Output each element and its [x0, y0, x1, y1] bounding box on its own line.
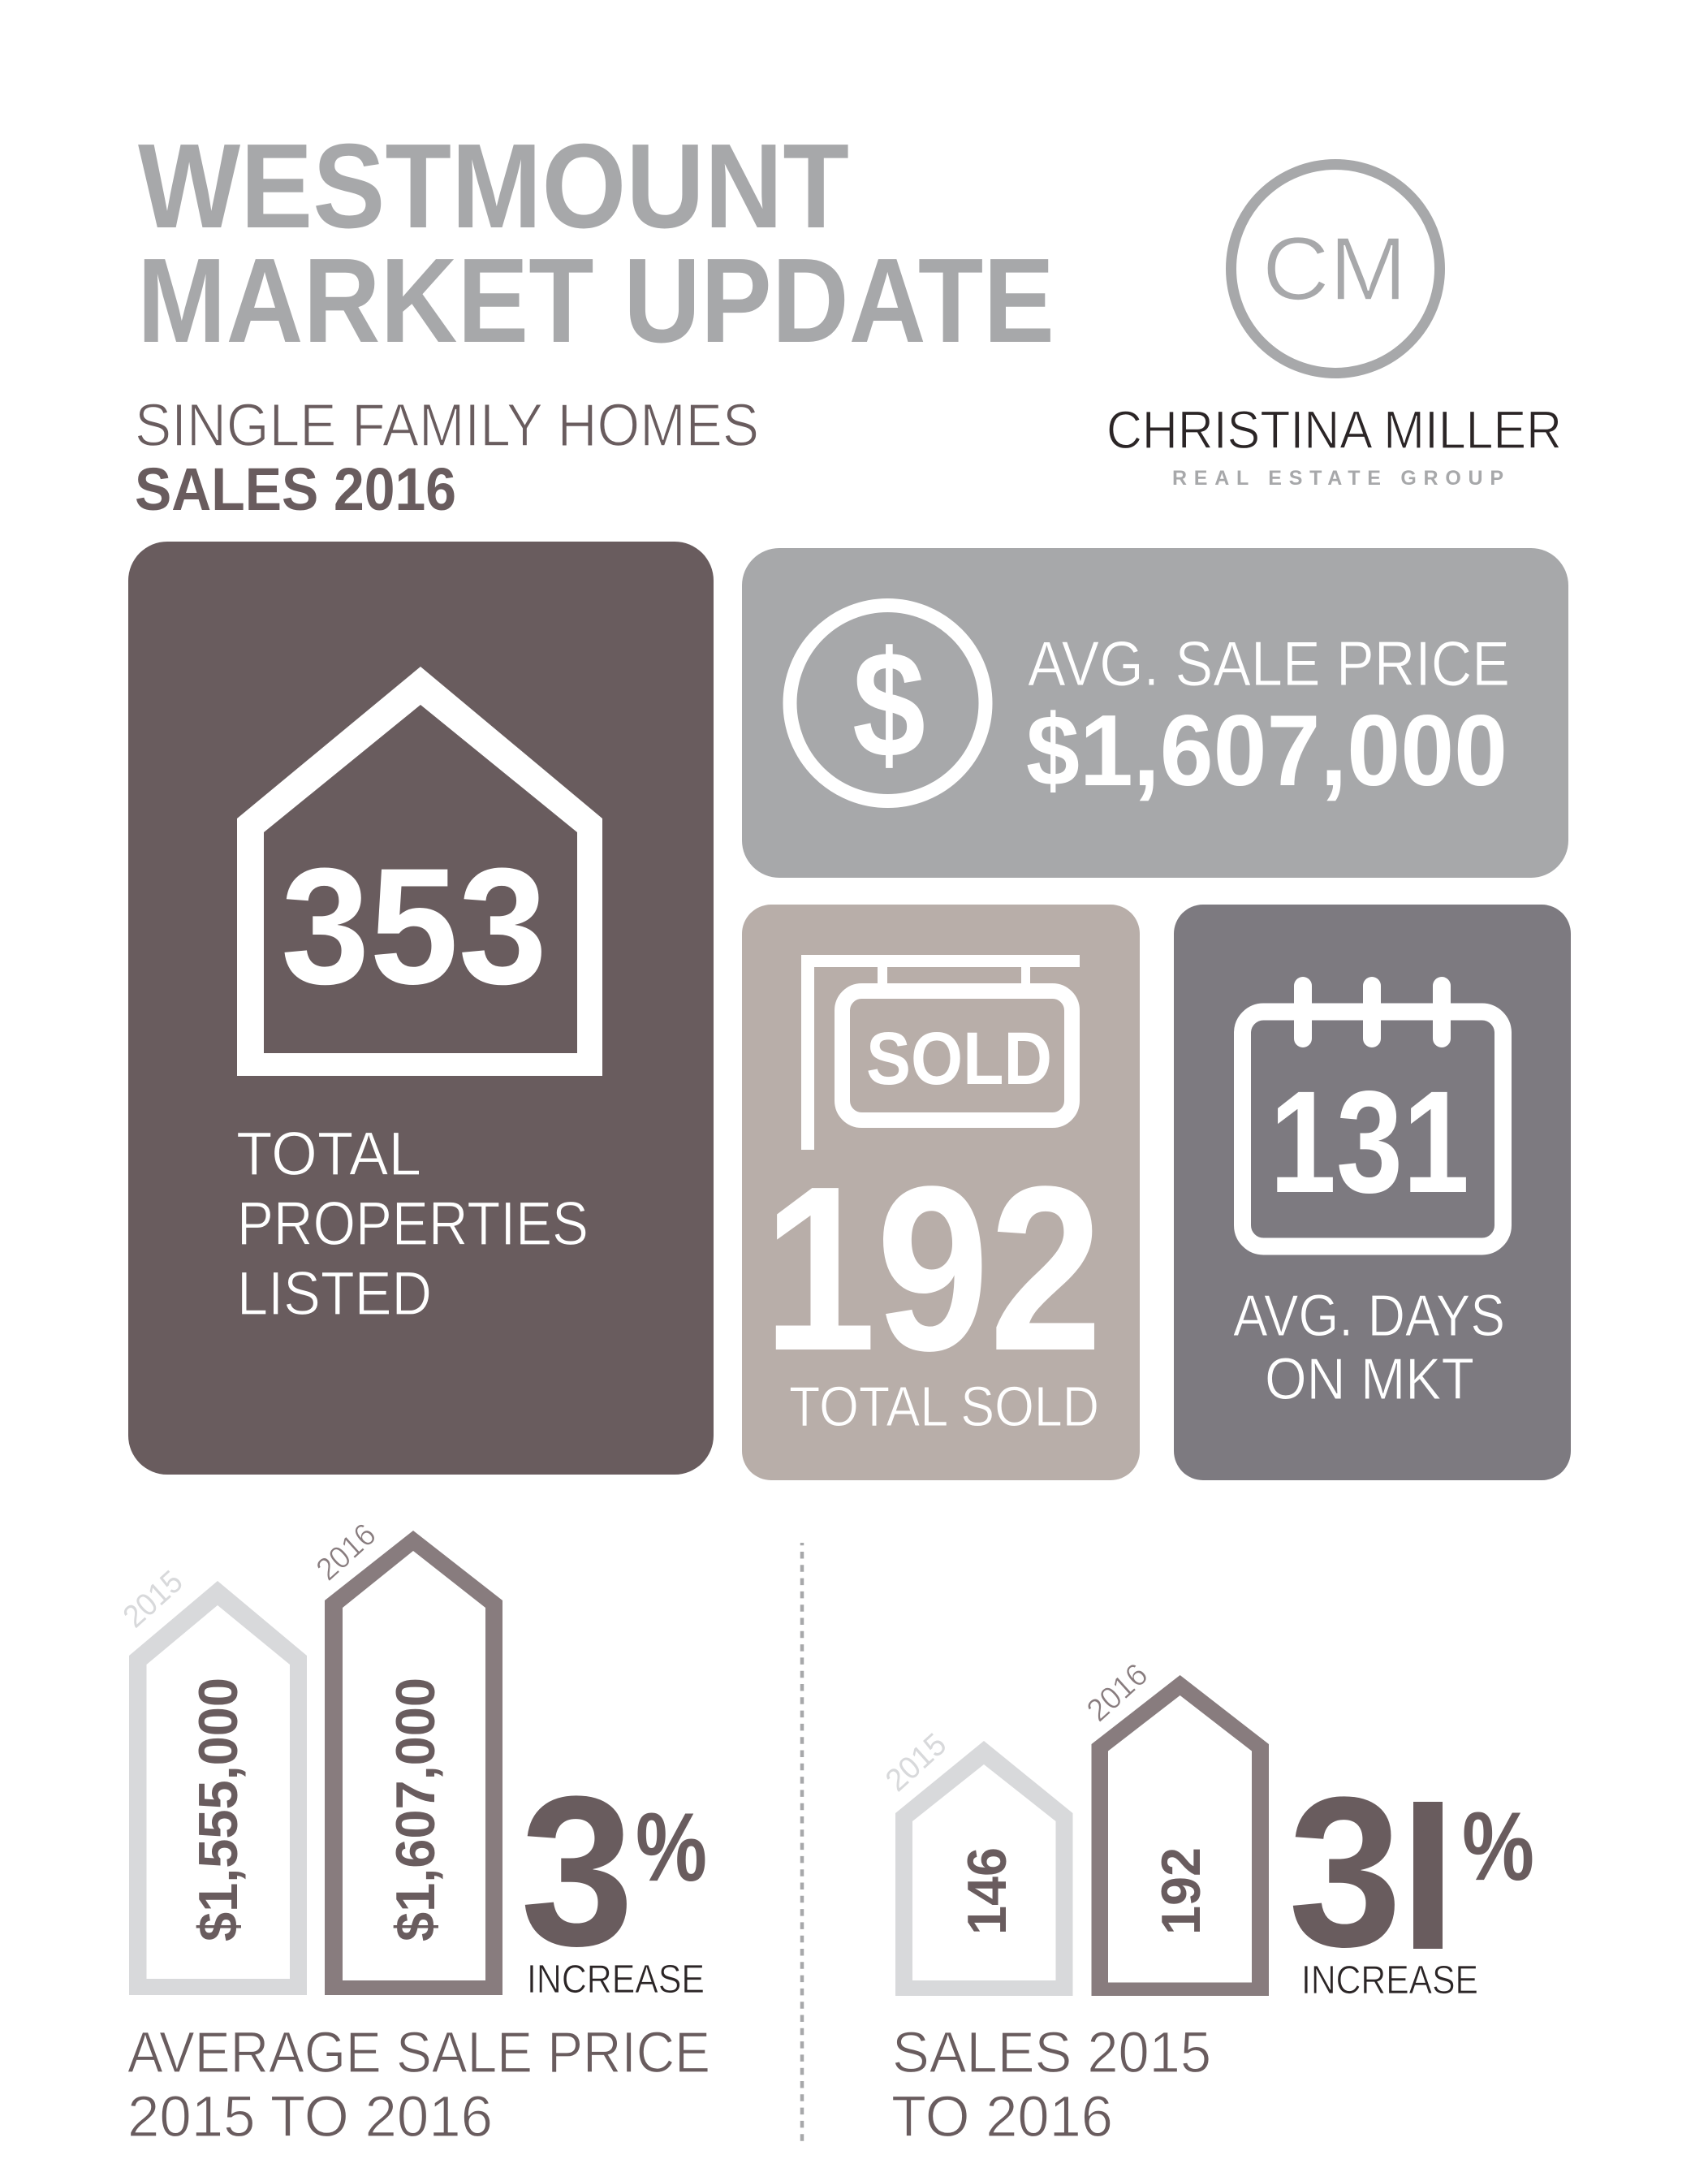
stat: 31 percent increase: %	[1462, 1792, 1534, 1901]
title: MARKET UPDATE	[137, 234, 1055, 368]
icon: house outline	[237, 667, 602, 1076]
panel: total sold	[742, 905, 1140, 1480]
icon: dollar circle: $	[852, 620, 925, 789]
bar: 2015 sales house	[895, 1741, 1073, 1996]
panel: total properties listed	[128, 542, 714, 1475]
label: total properties listed: TOTAL	[236, 1120, 421, 1189]
stat: 353: 353	[281, 834, 547, 1019]
stat: 31 percent increase: 3	[1288, 1752, 1402, 1991]
label: 2015: 2015	[117, 1564, 189, 1635]
chart: sales comparison	[879, 1657, 1534, 2149]
title: WESTMOUNT	[138, 119, 849, 253]
title	[137, 119, 1055, 368]
icon: sold sign	[801, 955, 1080, 1150]
stat: 31 percent increase	[1292, 1796, 1533, 1949]
logo: Christina Miller Real Estate Group	[1106, 164, 1562, 490]
bar: 2016 sales house	[1091, 1675, 1269, 1996]
label: total properties listed: PROPERTIES	[237, 1190, 589, 1259]
chart: average sale price comparison	[117, 1517, 710, 2149]
subtitle: SALES 2016	[135, 456, 456, 523]
bar: 2015 price house	[129, 1581, 307, 1995]
caption: sales 2015 to 2016: SALES 2015	[892, 2021, 1211, 2085]
bar: 2016 sales house: 192	[1150, 1847, 1212, 1935]
label: total sold: TOTAL SOLD	[789, 1375, 1099, 1438]
icon: sold sign: SOLD	[866, 1017, 1052, 1100]
bar: 2015 sales house: 146	[956, 1847, 1018, 1935]
caption: sales 2015 to 2016: TO 2016	[891, 2085, 1113, 2149]
icon: calendar	[1242, 986, 1503, 1246]
icon: dollar circle	[790, 606, 986, 801]
logo: Christina Miller Real Estate Group: REAL ESTATE GROUP	[1172, 467, 1503, 490]
bar: 2015 price house: $1,555,000	[188, 1678, 249, 1941]
stat: 31 percent increase: 1	[1380, 1756, 1499, 1994]
stat: 3 percent increase	[520, 1751, 707, 1990]
caption: average sale price 2015 to 2016: 2015 TO 2016	[127, 2085, 493, 2149]
label: avg. days on mkt	[1233, 1284, 1505, 1412]
panel: average days on market	[1174, 905, 1571, 1480]
stat: 131: 131	[1270, 1060, 1469, 1223]
label: avg. days on mkt: ON MKT	[1265, 1347, 1474, 1412]
caption: average sale price 2015 to 2016: AVERAGE SALE PRICE	[127, 2021, 710, 2085]
bar: 2016 price house: $1,607,000	[385, 1678, 446, 1941]
label: avg. sale price: AVG. SALE PRICE	[1028, 628, 1510, 699]
label: avg. days on mkt: AVG. DAYS	[1233, 1284, 1505, 1349]
label: increase: INCREASE	[1301, 1959, 1478, 2002]
stat: 3 percent increase: 3	[520, 1751, 634, 1990]
bar: 2016 price house	[325, 1531, 502, 1995]
stat: $1,607,000: $1,607,000	[1026, 695, 1507, 807]
label: 2016: 2016	[310, 1517, 382, 1587]
logo: Christina Miller Real Estate Group: CM	[1262, 219, 1407, 319]
stat: 192: 192	[763, 1138, 1102, 1400]
label: total properties listed: LISTED	[237, 1259, 432, 1328]
panel: average sale price	[742, 548, 1568, 878]
label: total properties listed	[236, 1120, 589, 1328]
label: increase: INCREASE	[527, 1958, 705, 2002]
label: 2016: 2016	[1080, 1657, 1154, 1729]
label: 2015: 2015	[879, 1727, 953, 1799]
stat: 3 percent increase: %	[636, 1793, 707, 1902]
caption: sales 2015 to 2016	[891, 2021, 1211, 2149]
subtitle	[135, 391, 759, 523]
caption: average sale price 2015 to 2016	[127, 2021, 710, 2149]
logo: Christina Miller Real Estate Group: CHRISTINA MILLER	[1106, 399, 1562, 460]
subtitle: SINGLE FAMILY HOMES	[135, 391, 759, 459]
